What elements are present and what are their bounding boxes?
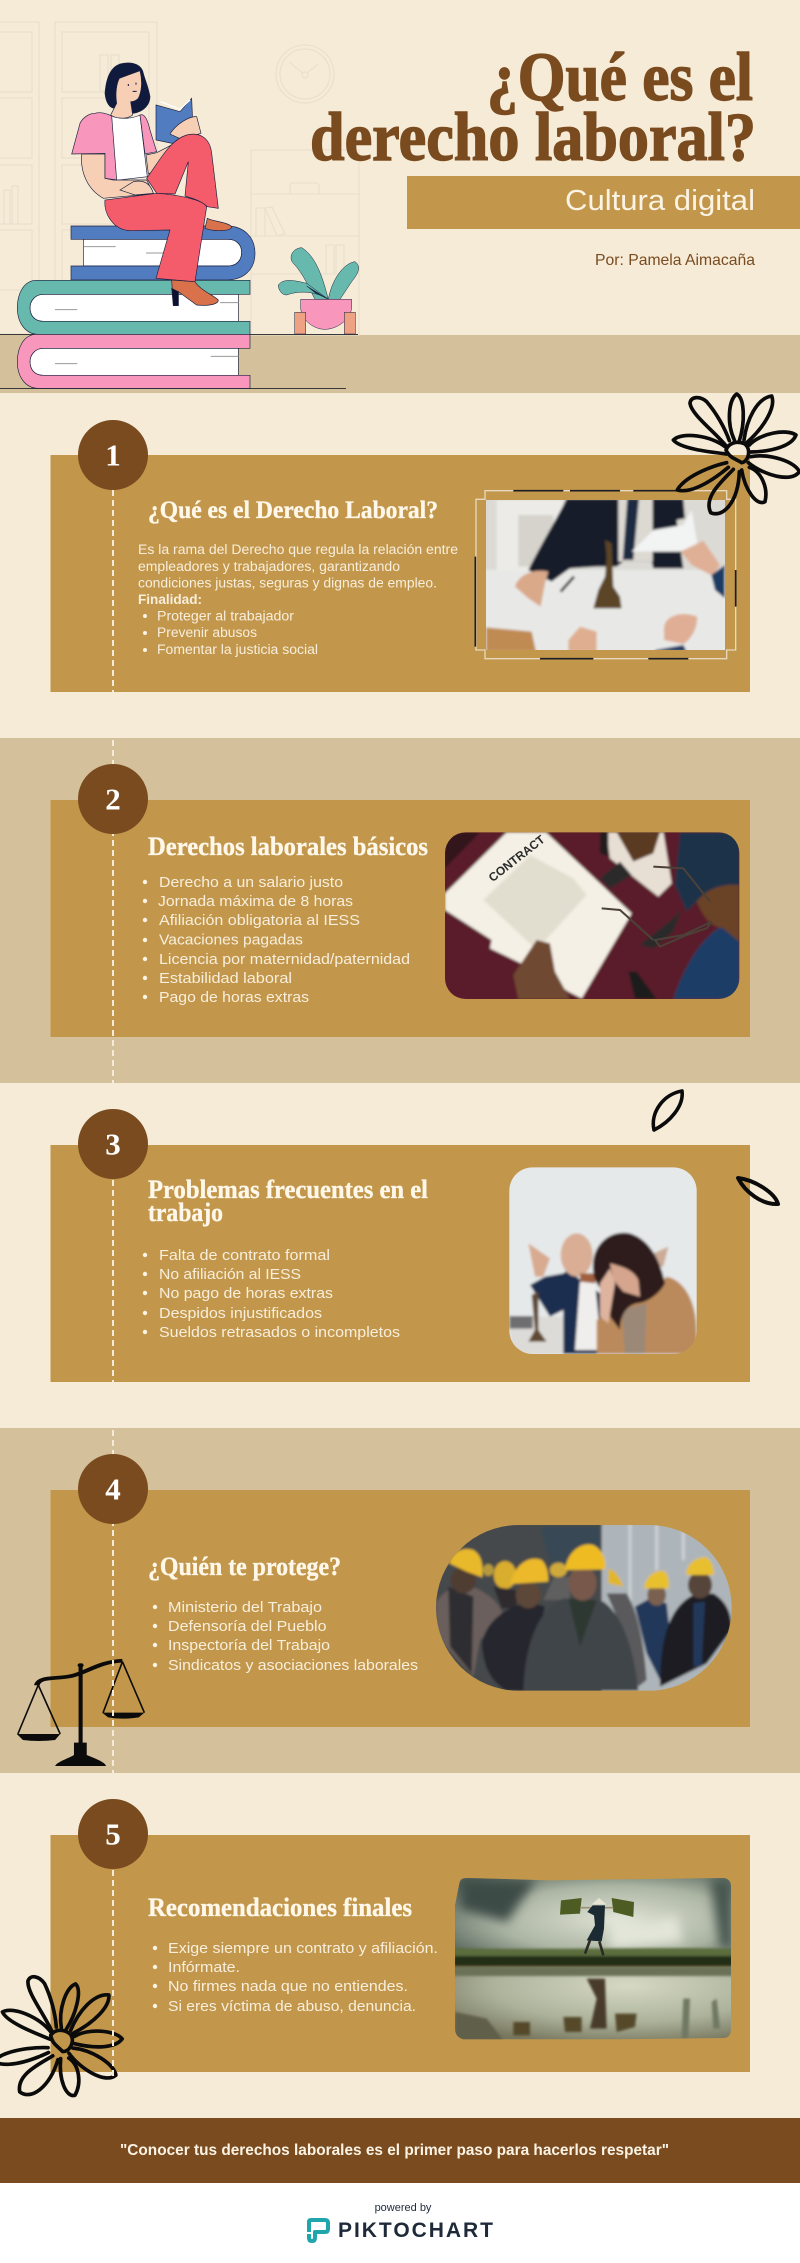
text block: section 1: Fomentar la justicia social: [157, 642, 318, 657]
heading: section 3: trabajo: [148, 1198, 223, 1227]
list: section 3: No pago de horas extras: [159, 1285, 333, 1302]
step 5 badge: [78, 1799, 148, 1869]
list: section 3: No afiliación al IESS: [159, 1266, 301, 1283]
footer quote band: "Conocer tus derechos laborales es el primer paso para hacerlos respetar": [120, 2142, 669, 2159]
list: section 2: Jornada máxima de 8 horas: [158, 893, 353, 910]
step 3 badge: 3: [105, 1126, 121, 1162]
list: section 2: Estabilidad laboral: [159, 970, 292, 987]
subtitle bar: [407, 176, 800, 229]
step 4 badge: 4: [105, 1472, 121, 1506]
text block: section 1: condiciones justas, seguras y dignas de empleo.: [138, 576, 437, 590]
step 5 badge: 5: [105, 1816, 121, 1852]
heading: section 2: Derechos laborales básicos: [148, 832, 428, 861]
illustration: woman reading on books: [17, 63, 255, 388]
list: section 4: Sindicatos y asociaciones laborales: [168, 1657, 418, 1674]
list: section 4: Defensoría del Pueblo: [168, 1618, 326, 1635]
subtitle bar: Cultura digital: [565, 185, 755, 217]
photo: workers with yellow helmets: [433, 1523, 735, 1693]
credit: powered by: powered by: [375, 2202, 432, 2214]
step 2 badge: [78, 764, 148, 834]
list: section 5: Si eres víctima de abuso, denuncia.: [168, 1998, 416, 2015]
heading: section 4: ¿Quién te protege?: [148, 1552, 341, 1581]
step 1 badge: [78, 420, 148, 490]
logo: Piktochart: PIKTOCHART: [338, 2219, 493, 2242]
text block: section 1: Prevenir abusos: [157, 625, 257, 640]
step 3 badge: [78, 1109, 148, 1179]
icon: balance scales: [17, 1661, 144, 1766]
list: section 2: Afiliación obligatoria al IESS: [159, 912, 360, 929]
wallpaper: shelves and clock: [0, 22, 359, 335]
heading: section 1: ¿Qué es el Derecho Laboral?: [148, 497, 438, 524]
step 4 badge: [78, 1454, 148, 1524]
heading: section 5: Recomendaciones finales: [148, 1893, 412, 1922]
photo: contract document and glasses: CONTRACT: [486, 832, 548, 885]
author: Por: Pamela Aimacaña: [595, 252, 755, 269]
text block: section 1: Proteger al trabajador: [157, 608, 295, 624]
list: section 5: [153, 1940, 438, 2015]
icon: flower top right: [673, 394, 799, 514]
list: section 3: Despidos injustificados: [159, 1305, 322, 1322]
title: ¿Qué es el: [487, 39, 753, 115]
list: section 3: [143, 1247, 400, 1341]
list: section 4: Ministerio del Trabajo: [168, 1599, 322, 1616]
icon: leaf 1: [653, 1091, 682, 1130]
step 1 badge: 1: [105, 438, 121, 472]
list: section 2: [143, 874, 410, 1006]
section backgrounds: [0, 738, 800, 1773]
text block: section 1: empleadores y trabajadores, garantizando: [138, 559, 400, 574]
floor lines: [0, 334, 358, 388]
list: section 5: Infórmate.: [168, 1959, 240, 1976]
list: section 2: Pago de horas extras: [159, 989, 309, 1006]
title: [310, 39, 756, 175]
text block: section 1: Es la rama del Derecho que regula la relación entre: [138, 542, 458, 557]
timeline dashed line: [112, 490, 114, 2118]
heading: section 3: Problemas frecuentes en el: [148, 1175, 428, 1204]
text block: section 1: [138, 542, 458, 657]
list: section 4: [153, 1599, 418, 1674]
woman figure: [72, 63, 232, 306]
book stack: [17, 226, 255, 388]
heading: section 3: [148, 1175, 428, 1227]
list: section 4: Inspectoría del Trabajo: [168, 1637, 330, 1654]
list: section 5: Exige siempre un contrato y afiliación.: [168, 1940, 438, 1957]
step 2 badge: 2: [105, 782, 121, 816]
list: section 2: Licencia por maternidad/paternidad: [159, 951, 410, 968]
panel: section cards: [50, 455, 750, 2072]
title: derecho laboral?: [310, 99, 756, 175]
list: section 3: Falta de contrato formal: [159, 1247, 330, 1264]
photo: stressed woman and shouting boss: [507, 1165, 700, 1357]
icon: leaf 2: [738, 1178, 778, 1204]
list: section 2: Derecho a un salario justo: [159, 874, 343, 891]
text block: section 1: Finalidad:: [138, 592, 202, 607]
list: section 2: Vacaciones pagadas: [159, 932, 303, 948]
white credit strip: [0, 2183, 800, 2263]
list: section 5: No firmes nada que no entiendes.: [168, 1978, 408, 1995]
icon: flower bottom left: [0, 1968, 136, 2116]
footer quote band: [0, 2118, 800, 2183]
list: section 3: Sueldos retrasados o incompletos: [159, 1324, 400, 1341]
photo: farmer carrying rice in flooded field: [453, 1875, 733, 2042]
photo: contract document and glasses: [440, 828, 743, 1002]
illustration: potted plant: [278, 248, 359, 334]
header band: [0, 335, 800, 393]
photo: signing contracts with justice statue: [475, 491, 736, 659]
